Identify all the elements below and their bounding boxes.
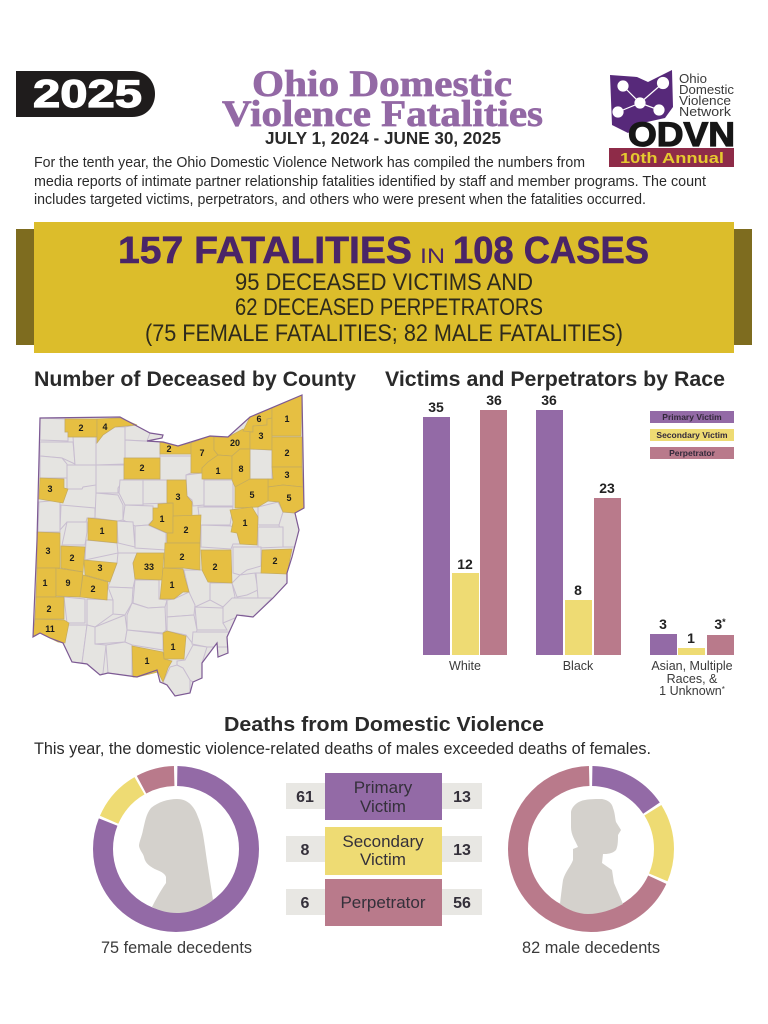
county counts: 1 [170, 642, 176, 652]
logo: ODVN [609, 70, 735, 167]
county counts: 1 [42, 578, 48, 588]
bars: Black: 36 [541, 392, 557, 408]
row: primary victim: Primary [354, 778, 413, 797]
row: secondary victim: 13 [453, 842, 471, 859]
county counts: 8 [238, 464, 244, 474]
title: Ohio Domestic [252, 64, 512, 105]
row: perpetrator [286, 879, 482, 926]
icon: female silhouette [139, 799, 213, 913]
logo: ODVN: Violence [679, 93, 731, 108]
legend [650, 411, 734, 459]
bars: Black: 23 [599, 480, 615, 496]
bars: Asian, multiple, unknown: 3 [659, 616, 667, 632]
logo: ODVN: ODVN [628, 116, 735, 154]
banner details [145, 269, 623, 347]
logo: ODVN: Ohio [679, 71, 707, 86]
county counts: 2 [272, 556, 278, 566]
county counts: 2 [78, 423, 84, 433]
banner headline [118, 230, 649, 272]
county counts: 3 [284, 470, 290, 480]
heading: county: Number of Deceased by County [34, 368, 356, 391]
row: perpetrator: 6 [301, 895, 310, 912]
bars: White: White [449, 659, 481, 673]
intro paragraph [34, 154, 707, 208]
bars: Black: Black [563, 659, 594, 673]
banner details: 62 DECEASED PERPETRATORS [235, 294, 543, 321]
county counts: 3 [175, 492, 181, 502]
bars: Asian, multiple, unknown [650, 616, 734, 698]
date range: JULY 1, 2024 - JUNE 30, 2025 [265, 128, 501, 148]
bars: White: 36 [486, 392, 502, 408]
county counts: 3 [45, 546, 51, 556]
banner headline: 108 CASES [453, 230, 649, 272]
county counts: 4 [102, 422, 108, 432]
county counts: 2 [212, 562, 218, 572]
deaths summary: This year, the domestic violence-related deaths of males exceeded deaths of females. [34, 740, 651, 758]
heading: race: Victims and Perpetrators by Race [385, 368, 725, 391]
county counts: 33 [144, 562, 154, 572]
row: secondary victim [286, 827, 482, 875]
banner [16, 222, 752, 353]
row: primary victim [286, 773, 482, 820]
map of Ohio counties [33, 395, 304, 696]
heading: deaths: Deaths from Domestic Violence [224, 714, 544, 736]
bars: Asian, multiple, unknown: 1 Unknown [659, 684, 722, 698]
row: primary victim: Victim [360, 797, 406, 816]
intro paragraph: For the tenth year, the Ohio Domestic Violence Network has compiled the numbers from [34, 154, 585, 171]
county counts: 5 [249, 490, 255, 500]
donut: male [518, 776, 664, 957]
county counts: 2 [179, 552, 185, 562]
row: secondary victim: Secondary [342, 832, 424, 851]
gray counties [38, 418, 299, 696]
row: primary victim: 13 [453, 789, 471, 806]
county counts: 5 [286, 493, 292, 503]
bars: Asian, multiple, unknown: 1 [687, 630, 695, 646]
county counts: 3 [258, 431, 264, 441]
row: secondary victim: 8 [301, 842, 310, 859]
row: perpetrator: 56 [453, 895, 471, 912]
row: primary victim: 61 [296, 789, 314, 806]
row: perpetrator: Perpetrator [340, 893, 426, 912]
female label: 75 female decedents [101, 938, 252, 957]
gold counties [33, 395, 304, 682]
bar chart: race [423, 392, 734, 698]
bars: White: 12 [457, 556, 473, 572]
table: decedent breakdown [286, 773, 482, 926]
county counts: 2 [183, 525, 189, 535]
icon: male silhouette [560, 799, 623, 914]
county counts: 1 [169, 580, 175, 590]
male label: 82 male decedents [522, 938, 660, 957]
banner details: (75 FEMALE FATALITIES; 82 MALE FATALITIES) [145, 320, 623, 347]
bars: Asian, multiple, unknown: Races, & [667, 672, 718, 686]
county counts: 1 [159, 514, 165, 524]
county counts: 1 [215, 466, 221, 476]
logo: ODVN: 10th Annual [620, 150, 724, 167]
county counts: 1 [99, 526, 105, 536]
county counts: 2 [90, 584, 96, 594]
logo: ODVN: Network [679, 104, 732, 119]
bars: Black [536, 392, 621, 673]
donut: female [101, 776, 252, 957]
county counts: 2 [139, 463, 145, 473]
bars: Asian, multiple, unknown: Asian, Multiple [651, 659, 733, 673]
bars: Black: 8 [574, 582, 582, 598]
title: Violence Fatalities [222, 94, 543, 135]
county counts [42, 414, 292, 666]
county counts: 2 [284, 448, 290, 458]
bars: Asian, multiple, unknown: * [722, 685, 725, 694]
intro paragraph: media reports of intimate partner relationship fatalities identified by staff and member programs. The count [34, 173, 707, 190]
year badge [16, 71, 155, 117]
logo: ODVN: Domestic [679, 82, 734, 97]
county counts: 2 [46, 604, 52, 614]
banner headline: IN [420, 245, 445, 268]
bars: White: 35 [428, 399, 444, 415]
county counts: 11 [45, 624, 55, 634]
legend: Perpetrator [669, 448, 716, 458]
county counts: 1 [284, 414, 290, 424]
county counts: 2 [69, 553, 75, 563]
row: secondary victim: Victim [360, 850, 406, 869]
county counts: 9 [65, 578, 71, 588]
legend: Primary Victim [662, 412, 722, 422]
bars: Asian, multiple, unknown: * [722, 617, 726, 627]
bars: White [423, 392, 507, 673]
year badge: 2025 [33, 73, 142, 116]
county counts: 3 [97, 563, 103, 573]
county counts: 2 [166, 444, 172, 454]
banner details: 95 DECEASED VICTIMS AND [235, 269, 533, 296]
county counts: 3 [47, 484, 53, 494]
intro paragraph: includes targeted victims, perpetrators, and others who were present when the fatalities occurred. [34, 191, 646, 208]
county counts: 1 [242, 518, 248, 528]
county counts: 7 [199, 448, 205, 458]
banner headline: 157 FATALITIES [118, 230, 412, 272]
county counts: 6 [256, 414, 262, 424]
county counts: 20 [230, 438, 240, 448]
bars: Asian, multiple, unknown: 3 [714, 616, 722, 632]
legend: Secondary Victim [656, 430, 728, 440]
county counts: 1 [144, 656, 150, 666]
title [222, 64, 543, 135]
